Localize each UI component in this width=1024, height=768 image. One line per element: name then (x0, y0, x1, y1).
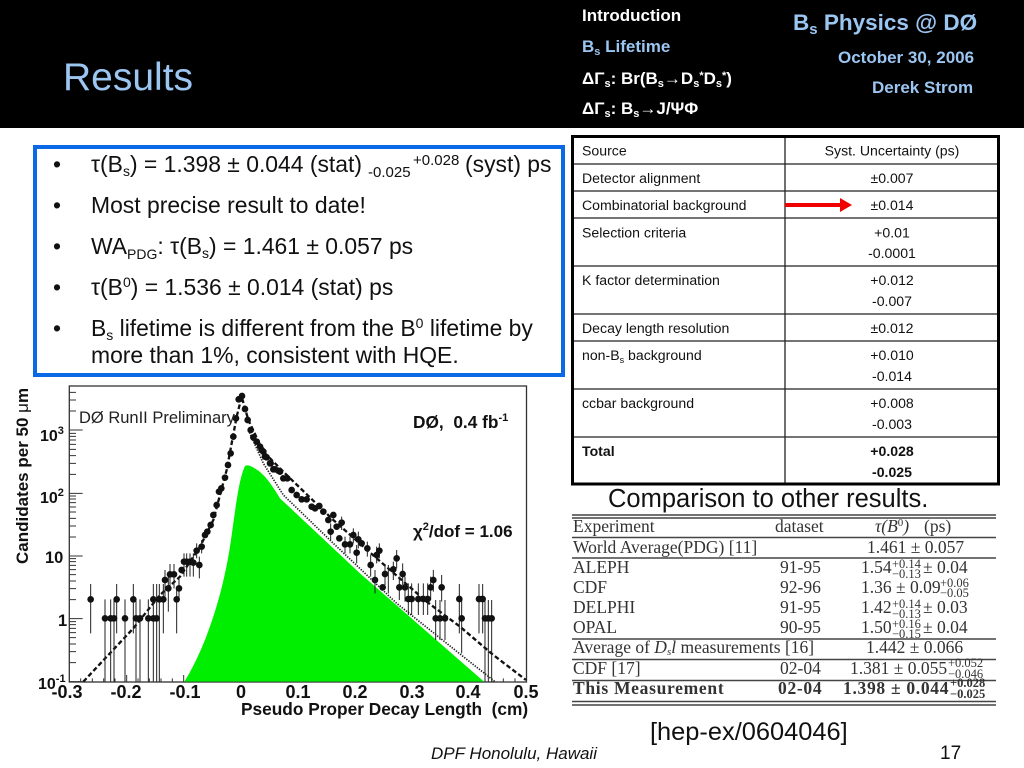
panel: comparison table: 1.54 (861, 557, 892, 577)
bullet: world average (53, 233, 413, 262)
panel: systematic uncertainty table: Detector alignment (582, 170, 700, 186)
bullet: B0 lifetime: ) = 1.536 ± 0.014 (stat) ps (131, 274, 393, 300)
navigation menu: : B (611, 99, 633, 118)
panel: comparison table: 0 (898, 517, 904, 529)
x axis labels: -0.2 (110, 682, 142, 702)
navigation menu: ΔΓ (582, 69, 604, 88)
data error bars left (91, 540, 202, 682)
panel: comparison table: World Average(PDG) [11] (573, 537, 757, 557)
panel: systematic uncertainty table: ±0.014 (870, 197, 914, 213)
panel: comparison table: 1.461 ± 0.057 (867, 537, 964, 557)
panel: systematic uncertainty table: s (620, 355, 625, 365)
bullet: world average: ) = 1.461 ± 0.057 ps (209, 233, 413, 259)
bullet: most precise: • (53, 192, 61, 218)
panel: comparison table: +0.16 (892, 617, 921, 631)
panel: comparison table: 1.50 (861, 617, 892, 637)
panel: systematic uncertainty table: non-B (582, 347, 620, 363)
panel: systematic uncertainty table: ±0.012 (870, 320, 914, 336)
navigation menu: * (722, 70, 727, 82)
panel: comparison table: −0.15 (892, 627, 921, 641)
panel: comparison table: DELPHI (573, 597, 635, 617)
panel: comparison table: −0.046 (948, 667, 983, 681)
panel: comparison table: 1.381 ± 0.055 (850, 658, 947, 678)
bullet: world average: : τ(B (157, 233, 202, 259)
panel: systematic uncertainty table (572, 136, 999, 484)
y axis labels: 3 (58, 425, 64, 437)
panel: comparison table: +0.14 (892, 597, 922, 611)
x axis labels: 0.2 (342, 682, 368, 702)
x axis labels: -0.3 (51, 682, 83, 702)
panel: systematic uncertainty table: -0.025 (872, 464, 912, 480)
bullet: lifetime difference: B (91, 315, 106, 341)
panel: comparison table: This Measurement (573, 678, 724, 698)
panel: comparison table: ) (902, 516, 909, 536)
panel: comparison table: 92-96 (780, 577, 821, 597)
dashed total fit curve (83, 397, 526, 682)
panel: comparison table (572, 515, 996, 705)
chart: pseudo proper decay length (13, 386, 539, 719)
heading: comparison: Comparison to other results. (608, 485, 928, 513)
bullet: Bs lifetime: -0.025 (368, 164, 411, 181)
navigation menu: s (604, 108, 611, 120)
panel: systematic uncertainty table: ccbar background (582, 395, 694, 411)
panel: comparison table: dataset (775, 516, 824, 536)
panel: comparison table: 91-95 (780, 597, 821, 617)
y axis labels: 10 (38, 676, 56, 693)
x axis labels: 0.4 (455, 682, 481, 702)
bullet: Bs lifetime: s (123, 163, 130, 179)
bullet: B0 lifetime: τ(B (91, 274, 123, 300)
bullet: Bs lifetime: +0.028 (413, 152, 459, 169)
x axis labels: -0.1 (169, 682, 201, 702)
citation: [hep-ex/0604046] (650, 718, 848, 746)
panel: systematic uncertainty table: Source (582, 142, 627, 158)
bullet: Bs lifetime: τ(B (91, 151, 123, 177)
page number: 17 (940, 743, 961, 764)
footer: venue: DPF Honolulu, Hawaii (431, 744, 598, 763)
arrow: red pointer to combinatorial background (785, 198, 852, 212)
data points left (91, 396, 280, 618)
panel: comparison table: CDF (573, 577, 607, 597)
panel: comparison table: CDF [17] (573, 658, 641, 678)
talk information: B (793, 10, 809, 35)
panel: comparison table: 90-95 (780, 617, 821, 637)
panel: comparison table: −0.025 (950, 687, 985, 701)
talk information: Physics @ DØ (818, 10, 977, 35)
panel: comparison table: +0.052 (948, 656, 983, 670)
panel: systematic uncertainty table: K factor determination (582, 272, 720, 288)
panel: comparison table: ALEPH (573, 557, 630, 577)
x axis labels: 0.3 (399, 682, 425, 702)
data points right (262, 450, 492, 618)
panel: comparison table: 1.442 ± 0.066 (866, 637, 963, 657)
y axis labels: 10 (40, 428, 58, 445)
panel: comparison table: 91-95 (780, 557, 821, 577)
bullet: B0 lifetime: • (53, 274, 61, 300)
bullet: world average: PDG (127, 246, 157, 262)
panel: comparison table: 1.398 ± 0.044 (843, 678, 949, 698)
navigation menu (582, 6, 732, 120)
panel: comparison table: +0.028 (950, 676, 985, 690)
chi-squared label: /dof = 1.06 (429, 522, 513, 541)
panel: comparison table: +0.06 (940, 576, 969, 590)
panel: comparison table: +0.14 (892, 557, 922, 571)
bullet: Bs lifetime (53, 151, 551, 181)
navigation menu: ) (726, 69, 732, 88)
bullet: most precise: Most precise result to date! (91, 192, 366, 218)
data error bars right (331, 517, 492, 682)
navigation menu: ΔΓ (582, 99, 604, 118)
x axis labels: 0 (236, 682, 246, 702)
dotted background fit curve (248, 430, 495, 682)
bullet: lifetime difference: more than 1%, consistent with HQE. (91, 342, 459, 368)
chi-squared label: χ (413, 522, 423, 541)
panel: systematic uncertainty table: +0.010 (870, 347, 914, 363)
navigation menu: s (693, 78, 699, 90)
panel: systematic uncertainty table: +0.028 (870, 443, 914, 459)
bullet: lifetime difference (53, 315, 533, 368)
y axis labels: 1 (58, 612, 67, 630)
y axis labels: 2 (58, 487, 64, 499)
navigation menu: s (594, 46, 600, 58)
navigation menu: s (716, 78, 722, 90)
panel: systematic uncertainty table: Selection criteria (582, 224, 686, 240)
panel: comparison table: Average of D (573, 637, 667, 657)
panel: comparison table: ± 0.04 (923, 557, 968, 577)
navigation menu: D (704, 69, 716, 88)
panel: systematic uncertainty table: -0.014 (872, 368, 912, 384)
panel: systematic uncertainty table: Total (582, 443, 615, 459)
x axis labels (51, 682, 539, 702)
navigation menu: Introduction (582, 6, 681, 25)
panel: systematic uncertainty table: -0.0001 (868, 245, 916, 261)
panel: comparison table: 02-04 (780, 658, 821, 678)
navigation menu: s (633, 108, 639, 120)
chi-squared label: 2 (423, 521, 429, 533)
panel: systematic uncertainty table: +0.01 (874, 224, 910, 240)
bullet: lifetime difference: 0 (416, 315, 424, 331)
x axis labels: 0.5 (513, 682, 539, 702)
x axis labels: 0.1 (285, 682, 311, 702)
bullet: lifetime difference: lifetime is different from the B (113, 315, 416, 341)
navigation menu: : Br(B (611, 69, 658, 88)
panel: systematic uncertainty table: +0.008 (870, 395, 914, 411)
panel: key results bullets (35, 147, 563, 375)
talk information: Derek Strom (872, 78, 973, 97)
y axis title: Candidates per 50 μm (13, 388, 32, 564)
panel: systematic uncertainty table: Syst. Uncertainty (ps) (825, 142, 959, 158)
bullet: world average: WA (91, 233, 127, 259)
preliminary label: DØ RunII Preliminary (79, 409, 236, 427)
talk information: s (809, 21, 818, 38)
navigation menu: Lifetime (600, 37, 670, 56)
navigation menu: * (699, 70, 704, 82)
panel: comparison table: −0.13 (892, 567, 921, 581)
panel: comparison table: 1.42 (861, 597, 892, 617)
luminosity label: -1 (498, 412, 508, 424)
panel: comparison table: 02-04 (778, 678, 822, 698)
bullet: world average: • (53, 233, 61, 259)
panel: systematic uncertainty table: Decay length resolution (582, 320, 729, 336)
bullet: lifetime difference: s (106, 327, 113, 343)
bullet: world average: s (202, 245, 209, 261)
panel: comparison table: measurements [16] (680, 637, 814, 657)
y axis labels: 10 (45, 549, 63, 567)
panel: comparison table: OPAL (573, 617, 617, 637)
panel: comparison table: s (667, 646, 671, 658)
header band (0, 0, 1024, 128)
panel: comparison table: Experiment (573, 516, 655, 536)
panel: comparison table: l (671, 637, 676, 657)
panel: systematic uncertainty table: +0.012 (870, 272, 914, 288)
bullet: lifetime difference: • (53, 315, 61, 341)
y axis labels: -1 (56, 673, 66, 685)
bullet: B0 lifetime: 0 (123, 274, 131, 290)
bullet: Bs lifetime: ) = 1.398 ± 0.044 (stat) (130, 151, 362, 177)
navigation menu: s (658, 78, 664, 90)
bullet: lifetime difference: lifetime by (423, 315, 533, 341)
panel: systematic uncertainty table: background (624, 347, 702, 363)
panel: comparison table: ± 0.04 (923, 617, 968, 637)
talk information: October 30, 2006 (838, 48, 974, 67)
bullet: Bs lifetime: (syst) ps (465, 151, 551, 177)
title: Results (63, 56, 193, 99)
panel: systematic uncertainty table: -0.007 (872, 293, 912, 309)
panel: comparison table: τ(B (875, 516, 898, 536)
panel: comparison table: (ps) (924, 516, 951, 536)
navigation menu: s (604, 78, 611, 90)
navigation menu: B (582, 37, 594, 56)
y axis labels (38, 425, 67, 693)
bullet: Bs lifetime: • (53, 151, 61, 177)
panel: systematic uncertainty table: ±0.007 (870, 170, 914, 186)
panel: comparison table: −0.05 (940, 586, 969, 600)
navigation menu: →J/ΨΦ (639, 99, 698, 118)
luminosity label: DØ, 0.4 fb (413, 412, 498, 432)
panel: comparison table: 1.36 ± 0.09 (861, 577, 941, 597)
panel: comparison table: −0.13 (892, 607, 921, 621)
panel: systematic uncertainty table: -0.003 (872, 416, 912, 432)
panel: systematic uncertainty table: Combinatorial background (582, 197, 747, 213)
x axis title: Pseudo Proper Decay Length (cm) (241, 699, 528, 719)
green signal fill (184, 465, 484, 682)
navigation menu: →D (664, 69, 693, 88)
panel: comparison table: ± 0.03 (923, 597, 968, 617)
talk information (793, 10, 977, 97)
y axis labels: 10 (40, 490, 58, 507)
